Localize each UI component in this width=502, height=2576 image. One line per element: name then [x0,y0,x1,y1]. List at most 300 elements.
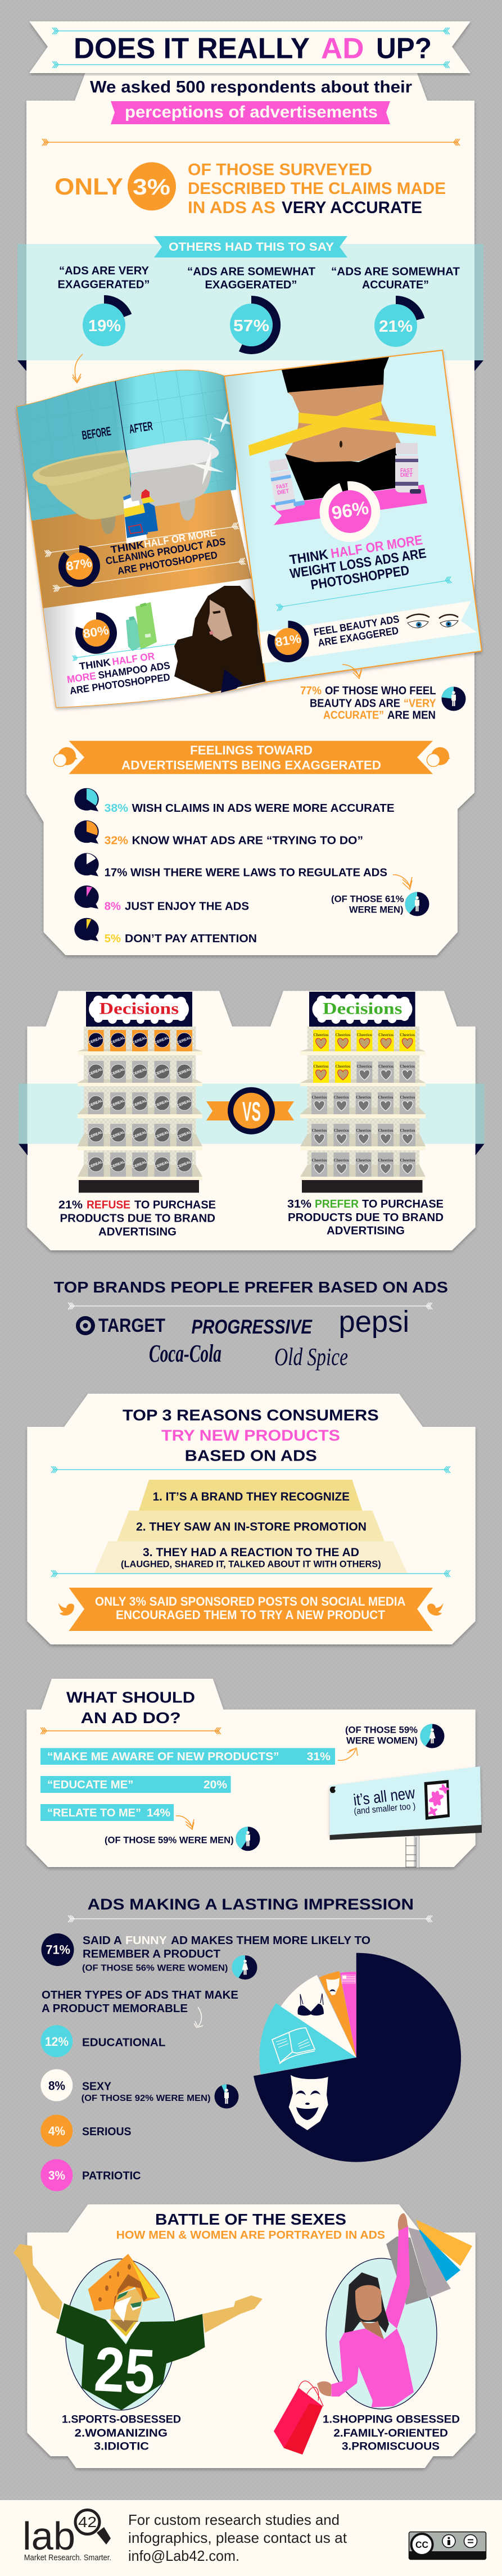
legend: 8% sexy: SEXY [82,2080,112,2093]
icon: shampoo bottles [126,602,157,651]
bar: relate to me 14% [40,1804,174,1821]
stat: 96% weight loss: 96% [330,497,370,523]
headline stat: only 3%: ONLY [55,173,123,200]
legend: 12% educational [40,2025,165,2057]
callout: 59% women [345,1724,444,1748]
bar: educate me 20%: “EDUCATE ME” [47,1779,134,1791]
quote stat: somewhat accurate 21%: 21% [379,318,413,336]
cereal boxes: CEREAL [88,1067,103,1077]
stat: 80% shampoo [66,612,171,697]
caption: 21% refuse: TO PURCHASE [134,1199,216,1212]
cereal boxes: highlighted and grey: Cheerios [334,1128,349,1133]
icon: tablet with flowers [424,1780,450,1820]
billboard headline: it’s all new [352,1784,417,1810]
heading: BATTLE OF THE SEXES [155,2211,346,2228]
cereal boxes: highlighted and grey: Cheerios [400,1032,415,1037]
contact text: info@Lab42.com. [128,2547,239,2564]
subheading: other types of ads: A PRODUCT MEMORABLE [42,2003,188,2015]
arrow: into magazine [73,354,83,383]
subheading: HOW MEN & WOMEN ARE PORTRAYED IN ADS [116,2229,385,2241]
icon: twitter bird right [427,1603,444,1616]
logo: lab42: 42 [78,2514,97,2530]
caption: 21% refuse: PRODUCTS DUE TO BRAND [60,1213,215,1225]
caption: 21% refuse [58,1199,216,1238]
cereal boxes: highlighted and grey: Cheerios [336,1032,350,1037]
contact text [128,2511,347,2564]
quote stat: somewhat accurate 21% [331,265,460,347]
legend: 8% sexy: 8% [48,2079,65,2093]
legend: 4% serious: SERIOUS [82,2126,132,2138]
cereal boxes: CEREAL [110,1130,125,1140]
red shopping bag [274,2381,323,2455]
callout: 61% men: WERE MEN) [349,905,404,915]
list: female stereotypes: 1.SHOPPING OBSESSED [323,2414,460,2426]
contact text: infographics, please contact us at [128,2529,347,2546]
legend: 8% sexy [40,2069,239,2108]
legend: 4% serious [40,2115,132,2146]
icon: creative commons badge: CC [415,2539,428,2550]
section: top brands [54,1278,448,1371]
cereal boxes: CEREAL [88,1160,103,1169]
illustration: male sports fan [13,2244,263,2410]
caption: 21% refuse: REFUSE [87,1199,130,1212]
cereal boxes: CEREAL [154,1160,170,1169]
cereal boxes: highlighted and grey: Cheerios [400,1158,415,1163]
logo: lab42: lab [22,2514,75,2558]
arrow: to legend [194,2007,203,2028]
heading: TRY NEW PRODUCTS [161,1427,340,1444]
title banner [29,21,471,73]
section: lasting impression [40,1896,461,2191]
row: 5%: DON’T PAY ATTENTION [125,933,257,945]
row: 38%: 38% [105,802,128,815]
cereal boxes: CEREAL [177,1160,192,1169]
caption: 31% prefer: 31% [287,1198,311,1210]
row: 17%: 17% WISH THERE WERE LAWS TO REGULATE ADS [105,867,387,879]
ribbon heading [154,236,347,257]
heading: TOP BRANDS PEOPLE PREFER BASED ON ADS [54,1278,448,1296]
illustration: waist with tape measure [248,357,436,500]
cereal boxes: CEREAL [110,1160,125,1169]
headline stat: only 3%: OF THOSE SURVEYED [188,161,372,179]
legend: 4% serious: 4% [48,2124,65,2138]
list: female stereotypes: 2.FAMILY-ORIENTED [333,2427,448,2439]
hair [344,2272,389,2337]
heading: WHAT SHOULD [66,1689,195,1706]
headline stat: only 3%: IN ADS AS [188,198,275,217]
callout: 77% men: ACCURATE” [323,709,384,722]
row: 38%: WISH CLAIMS IN ADS WERE MORE ACCURATE [132,802,395,815]
face and neck [355,2285,382,2320]
list: male stereotypes [62,2414,181,2453]
cereal boxes: highlighted and grey: Cheerios [336,1064,350,1069]
arrow: to men note [176,1816,194,1829]
logo: progressive: PROGRESSIVE [191,1316,313,1338]
caption: 31% prefer: TO PURCHASE [362,1198,444,1210]
legend: 3% patriotic [40,2159,141,2191]
cereal boxes: CEREAL [132,1130,147,1140]
cereal boxes: highlighted and grey: Cheerios [378,1032,394,1037]
after label: AFTER [128,419,153,436]
contact text: For custom research studies and [128,2511,340,2528]
cereal boxes: highlighted and grey: Cheerios [400,1128,415,1133]
footer [0,2500,502,2576]
pink ribbon [270,485,427,525]
cereal boxes: highlighted and grey: Cheerios [378,1095,393,1100]
icon: twitter bird left [58,1603,74,1616]
stat: 80% shampoo: THINK [79,657,111,672]
teal band [19,1084,485,1155]
cereal boxes: highlighted and grey: Cheerios [400,1064,415,1069]
cereal boxes: highlighted and grey [311,1030,415,1177]
logo: lab42 [22,2510,111,2563]
cereal boxes: CEREAL [132,1067,147,1077]
callout: 77% men: “VERY [404,697,436,710]
heading [123,1407,379,1465]
sign: Decisions [99,1000,179,1018]
icon: comedy mask [289,2075,328,2130]
quote stat: very exaggerated 19%: 19% [88,317,121,335]
title banner: UP? [376,33,432,65]
subtitle: We asked 500 respondents about their [90,78,412,97]
orange ribbon heading: FEELINGS TOWARD [190,743,313,757]
cereal boxes: highlighted and grey: Cheerios [356,1095,371,1100]
arrow: to women note [338,1748,358,1760]
callout: 77% men: ARE MEN [387,709,436,722]
raised arm and hand [384,2226,410,2329]
stat: 87% cleaning [58,527,227,587]
cereal boxes: CEREAL [154,1099,170,1108]
cereal boxes: highlighted and grey: Cheerios [334,1158,349,1163]
cereal boxes: CEREAL [110,1099,125,1108]
icon: apple logo [330,1787,336,1793]
orange ribbon: sponsored posts: ENCOURAGED THEM TO TRY A NEW PRODUCT [116,1608,386,1622]
row: 38% [74,788,395,815]
step 3: (LAUGHED, SHARED IT, TALKED ABOUT IT WITH OTHERS) [121,1559,381,1569]
shelf: refuse decisions [78,992,202,1193]
cream ribbon: beauty ads: ARE EXAGGERED [317,625,399,649]
icon: speech bubbles left [54,747,78,767]
callout: 77% men: 77% [300,684,322,697]
vs badge: VS [242,1097,261,1127]
jersey [56,2303,205,2410]
cereal boxes: CEREAL [154,1130,170,1140]
stat: 96% weight loss: HALF OR MORE [329,532,424,562]
heading: AN AD DO? [81,1709,181,1727]
white lower page [43,579,270,714]
bar: relate to me 14%: 14% [147,1807,170,1819]
shelving unit [78,1027,202,1193]
orange ribbon: sponsored posts [69,1588,433,1631]
icon: fast diet bottle right: DIET [400,472,413,478]
icon: flag [342,1975,355,1983]
caption: 31% prefer: PRODUCTS DUE TO BRAND [288,1212,444,1224]
callout: 59% women: WERE WOMEN) [346,1736,418,1746]
cereal boxes: highlighted and grey: Cheerios [357,1032,372,1037]
orange ribbon: sponsored posts: ONLY 3% SAID SPONSORED POSTS ON SOCIAL MEDIA [95,1594,406,1608]
cream ribbon: beauty ads: FEEL BEAUTY ADS [313,613,400,638]
quote stat: very exaggerated 19%: “ADS ARE VERY [59,265,150,277]
list: male stereotypes: 2.WOMANIZING [75,2427,168,2439]
cheese hat [88,2254,160,2311]
heading: BASED ON ADS [185,1447,317,1465]
bar: relate to me 14%: “RELATE TO ME” [47,1807,141,1819]
callout: 77% men [300,684,465,722]
sign: Decisions [323,1000,402,1018]
cereal boxes: CEREAL [88,1099,103,1108]
pie chart: ad types [254,1953,461,2162]
arrow: to beauty note [342,665,362,679]
cereal boxes: CEREAL [110,1036,125,1045]
stat: 71% funny: REMEMBER A PRODUCT [83,1948,220,1960]
icon: fast diet bottle left: FAST [276,482,288,491]
stat: 87% cleaning: ARE PHOTOSHOPPED [116,549,218,577]
cereal boxes: CEREAL [132,1160,147,1169]
row: 8% [74,885,249,912]
cereal boxes: highlighted and grey: Cheerios [400,1095,415,1100]
icon: fast diet bottle right [395,443,421,494]
legend: 8% sexy: (OF THOSE 92% WERE MEN) [82,2094,211,2103]
caption: 31% prefer [287,1198,444,1237]
row: 32%: KNOW WHAT ADS ARE “TRYING TO DO” [132,835,363,847]
callout: 77% men: OF THOSE WHO FEEL [325,684,436,697]
legend: 12% educational: EDUCATIONAL [82,2037,165,2049]
list: male stereotypes: 3.IDIOTIC [94,2441,149,2453]
shelving unit [300,1027,426,1193]
step 3 [94,1541,407,1573]
magazine: left page [17,360,270,714]
headline stat: only 3% [55,161,446,217]
sign [309,992,415,1027]
section: feelings toward advertisements [54,741,450,945]
cereal boxes: highlighted and grey: Cheerios [314,1032,328,1037]
row: 8%: 8% [105,900,121,912]
cream ribbon: beauty ads [260,601,477,663]
pyramid [94,1480,407,1573]
stat: 96% weight loss: THINK [288,547,329,568]
stat: 71% funny: FUNNY [125,1935,168,1947]
stat: 80% shampoo: ARE PHOTOSHOPPED [69,671,171,697]
cereal boxes: CEREAL [177,1036,192,1045]
heading: ADS MAKING A LASTING IMPRESSION [88,1896,414,1913]
title banner: AD [321,33,364,65]
cream ribbon: beauty ads: 81% [274,631,302,649]
illustration: woman with long hair [174,586,266,693]
row: 5% [74,918,257,945]
callout: 59% men [105,1827,260,1851]
cereal boxes: highlighted and grey: Cheerios [312,1128,327,1133]
subheading: other types of ads: OTHER TYPES OF ADS THAT MAKE [42,1989,238,2001]
cereal boxes [88,1030,192,1177]
caption: 21% refuse: 21% [58,1199,83,1212]
quote stat: somewhat exaggerated 57%: EXAGGERATED” [205,279,297,291]
step 2: 2. THEY SAW AN IN-STORE PROMOTION [136,1521,367,1534]
vs badge [206,1087,294,1135]
stat: 80% shampoo: HALF OR [111,650,155,667]
cereal boxes: highlighted and grey: Cheerios [312,1095,327,1100]
step 1 [139,1480,363,1511]
stat: 96% weight loss: WEIGHT LOSS ADS ARE [289,546,427,582]
legend: 3% patriotic: 3% [48,2168,65,2182]
cereal boxes: CEREAL [177,1099,192,1108]
cereal boxes: CEREAL [110,1067,125,1077]
icon: tragedy mask [326,1978,340,1995]
step 2 [117,1511,385,1541]
row: 5%: 5% [105,933,121,945]
icon: book [272,2028,315,2064]
stat: 71% funny: (OF THOSE 56% WERE WOMEN) [82,1964,228,1973]
cereal boxes: highlighted and grey: Cheerios [314,1064,328,1069]
cereal boxes: CEREAL [154,1036,170,1045]
orange ribbon heading: ADVERTISEMENTS BEING EXAGGERATED [121,758,381,772]
sign [86,992,192,1027]
icon: sparkles [185,406,240,490]
logo: coca-cola: Coca-Cola [149,1340,221,1367]
billboard subline: (and smaller too ) [354,1801,416,1816]
callout: 61% men [331,892,429,916]
headline stat: only 3%: 3% [133,175,170,200]
step 1: 1. IT’S A BRAND THEY RECOGNIZE [153,1490,350,1503]
quote stat: somewhat accurate 21%: “ADS ARE SOMEWHAT [331,265,460,278]
magazine: right page [224,350,482,682]
cereal boxes: highlighted and grey: Cheerios [312,1158,327,1163]
callout: 59% men: (OF THOSE 59% WERE MEN) [105,1835,234,1845]
stat: 80% shampoo: 80% [82,623,110,641]
stat: 80% shampoo: MORE [66,670,97,685]
floor [32,490,251,608]
quote stat: somewhat accurate 21%: ACCURATE” [362,279,429,291]
tiled wall [17,360,236,523]
cereal boxes: highlighted and grey: Cheerios [356,1158,371,1163]
stat: 71% funny: AD MAKES THEM MORE LIKELY TO [171,1935,370,1947]
quote stat: somewhat exaggerated 57%: “ADS ARE SOMEWHAT [187,265,315,278]
logo: target: TARGET [98,1315,165,1336]
shopping bags held up [386,2220,472,2305]
bathtub: before and after [33,440,219,534]
arms [13,2244,62,2320]
list: female stereotypes [323,2414,460,2453]
row: 32% [74,820,363,847]
row: 17% [74,853,387,879]
cereal boxes: CEREAL [132,1036,147,1045]
bar: educate me 20%: 20% [203,1779,227,1791]
icon: fast diet bottle left: DIET [277,488,290,496]
icon: bleach bottles [123,489,158,544]
callout: 61% men: (OF THOSE 61% [331,894,404,904]
bar: educate me 20% [40,1776,231,1793]
heading [66,1689,195,1727]
caption: 21% refuse: ADVERTISING [98,1226,177,1238]
panel: top 3 reasons [27,1394,476,1644]
stat: 80% shampoo: SHAMPOO ADS [97,659,171,681]
icon: bra [298,1994,324,2015]
cereal boxes: CEREAL [177,1067,192,1077]
cereal boxes: CEREAL [88,1036,103,1045]
row: 32%: 32% [105,835,128,847]
callout: 59% women: (OF THOSE 59% [345,1725,418,1735]
pink ribbon: perceptions of advertisements: perceptions of advertisements [125,103,378,121]
panel: what should an ad do [26,1679,482,1868]
caption: 31% prefer: ADVERTISING [327,1225,405,1237]
stat: 87% cleaning: 87% [65,555,93,573]
subheading: other types of ads [42,1989,238,2015]
quote stat: somewhat exaggerated 57%: 57% [233,317,269,335]
panel: battle of the sexes [13,2204,476,2468]
billboard [330,1766,482,1868]
icon: speech bubbles right [427,747,450,767]
shelf: prefer decisions [300,992,426,1193]
quote stat: somewhat exaggerated 57% [187,265,315,354]
post and ladder [406,1836,419,1868]
headline stat: only 3%: VERY ACCURATE [282,198,422,217]
arrow: to 61% men note [393,875,412,889]
cereal boxes: CEREAL [154,1067,170,1077]
bar: make me aware 31% [40,1748,335,1765]
jersey number: 25 [93,2334,157,2407]
stat: 87% cleaning: HALF OR MORE [143,527,217,550]
icon: eyes [406,614,458,628]
quote stat: very exaggerated 19% [57,265,150,346]
cereal boxes: CEREAL [88,1130,103,1140]
neck and face [110,2287,142,2321]
legend: 3% patriotic: PATRIOTIC [82,2170,141,2182]
cereal boxes: highlighted and grey: Cheerios [357,1064,372,1069]
logo: target [78,1315,165,1336]
headline stat: only 3%: DESCRIBED THE CLAIMS MADE [188,179,446,198]
panel: others had this to say band [17,236,483,371]
orange ribbon heading [69,741,433,774]
stat: 71% funny: SAID A [83,1935,122,1947]
ribbon heading: OTHERS HAD THIS TO SAY [169,241,334,254]
stat: 96% weight loss: PHOTOSHOPPED [310,563,410,593]
panel: store shelves comparison [19,991,485,1250]
step 3: 3. THEY HAD A REACTION TO THE AD [143,1546,359,1559]
quote stat: very exaggerated 19%: EXAGGERATED” [57,279,150,291]
list: male stereotypes: 1.SPORTS-OBSESSED [62,2414,181,2426]
cereal boxes: highlighted and grey: Cheerios [378,1064,394,1069]
cereal boxes: highlighted and grey: Cheerios [378,1128,393,1133]
cereal boxes: highlighted and grey: Cheerios [334,1095,349,1100]
icon: creative commons badge [409,2532,486,2559]
stat: 96% weight loss [288,480,427,593]
before / after divider [115,381,132,493]
logo: old spice: Old Spice [274,1343,348,1371]
logo: lab42: Market Research. Smarter. [24,2553,111,2563]
list: female stereotypes: 3.PROMISCUOUS [342,2441,440,2453]
illustration: female shopper [274,2213,472,2455]
row: 8%: JUST ENJOY THE ADS [125,900,249,912]
callout: 77% men: BEAUTY ADS ARE [310,697,400,710]
legend: 12% educational: 12% [45,2035,69,2049]
stat: 71% funny [42,1933,370,1980]
lower hand [317,2381,331,2396]
cereal boxes: highlighted and grey: Cheerios [378,1158,393,1163]
bar: make me aware 31%: “MAKE ME AWARE OF NEW PRODUCTS” [47,1751,279,1763]
caption: 31% prefer: PREFER [315,1198,359,1210]
before label: BEFORE [81,424,112,442]
cereal boxes: CEREAL [132,1099,147,1108]
title banner: DOES IT REALLY [74,33,310,65]
cereal boxes: CEREAL [177,1130,192,1140]
stat: 87% cleaning: THINK [110,539,145,555]
icon: fast diet bottle right: FAST [400,468,413,474]
stat: 87% cleaning: CLEANING PRODUCT ADS [105,536,227,567]
stat: 71% funny: 71% [46,1943,70,1957]
logo: pepsi: pepsi [338,1305,409,1339]
heading: TOP 3 REASONS CONSUMERS [123,1407,379,1424]
icon: fast diet bottle left [268,458,296,512]
blouse [331,2329,414,2407]
